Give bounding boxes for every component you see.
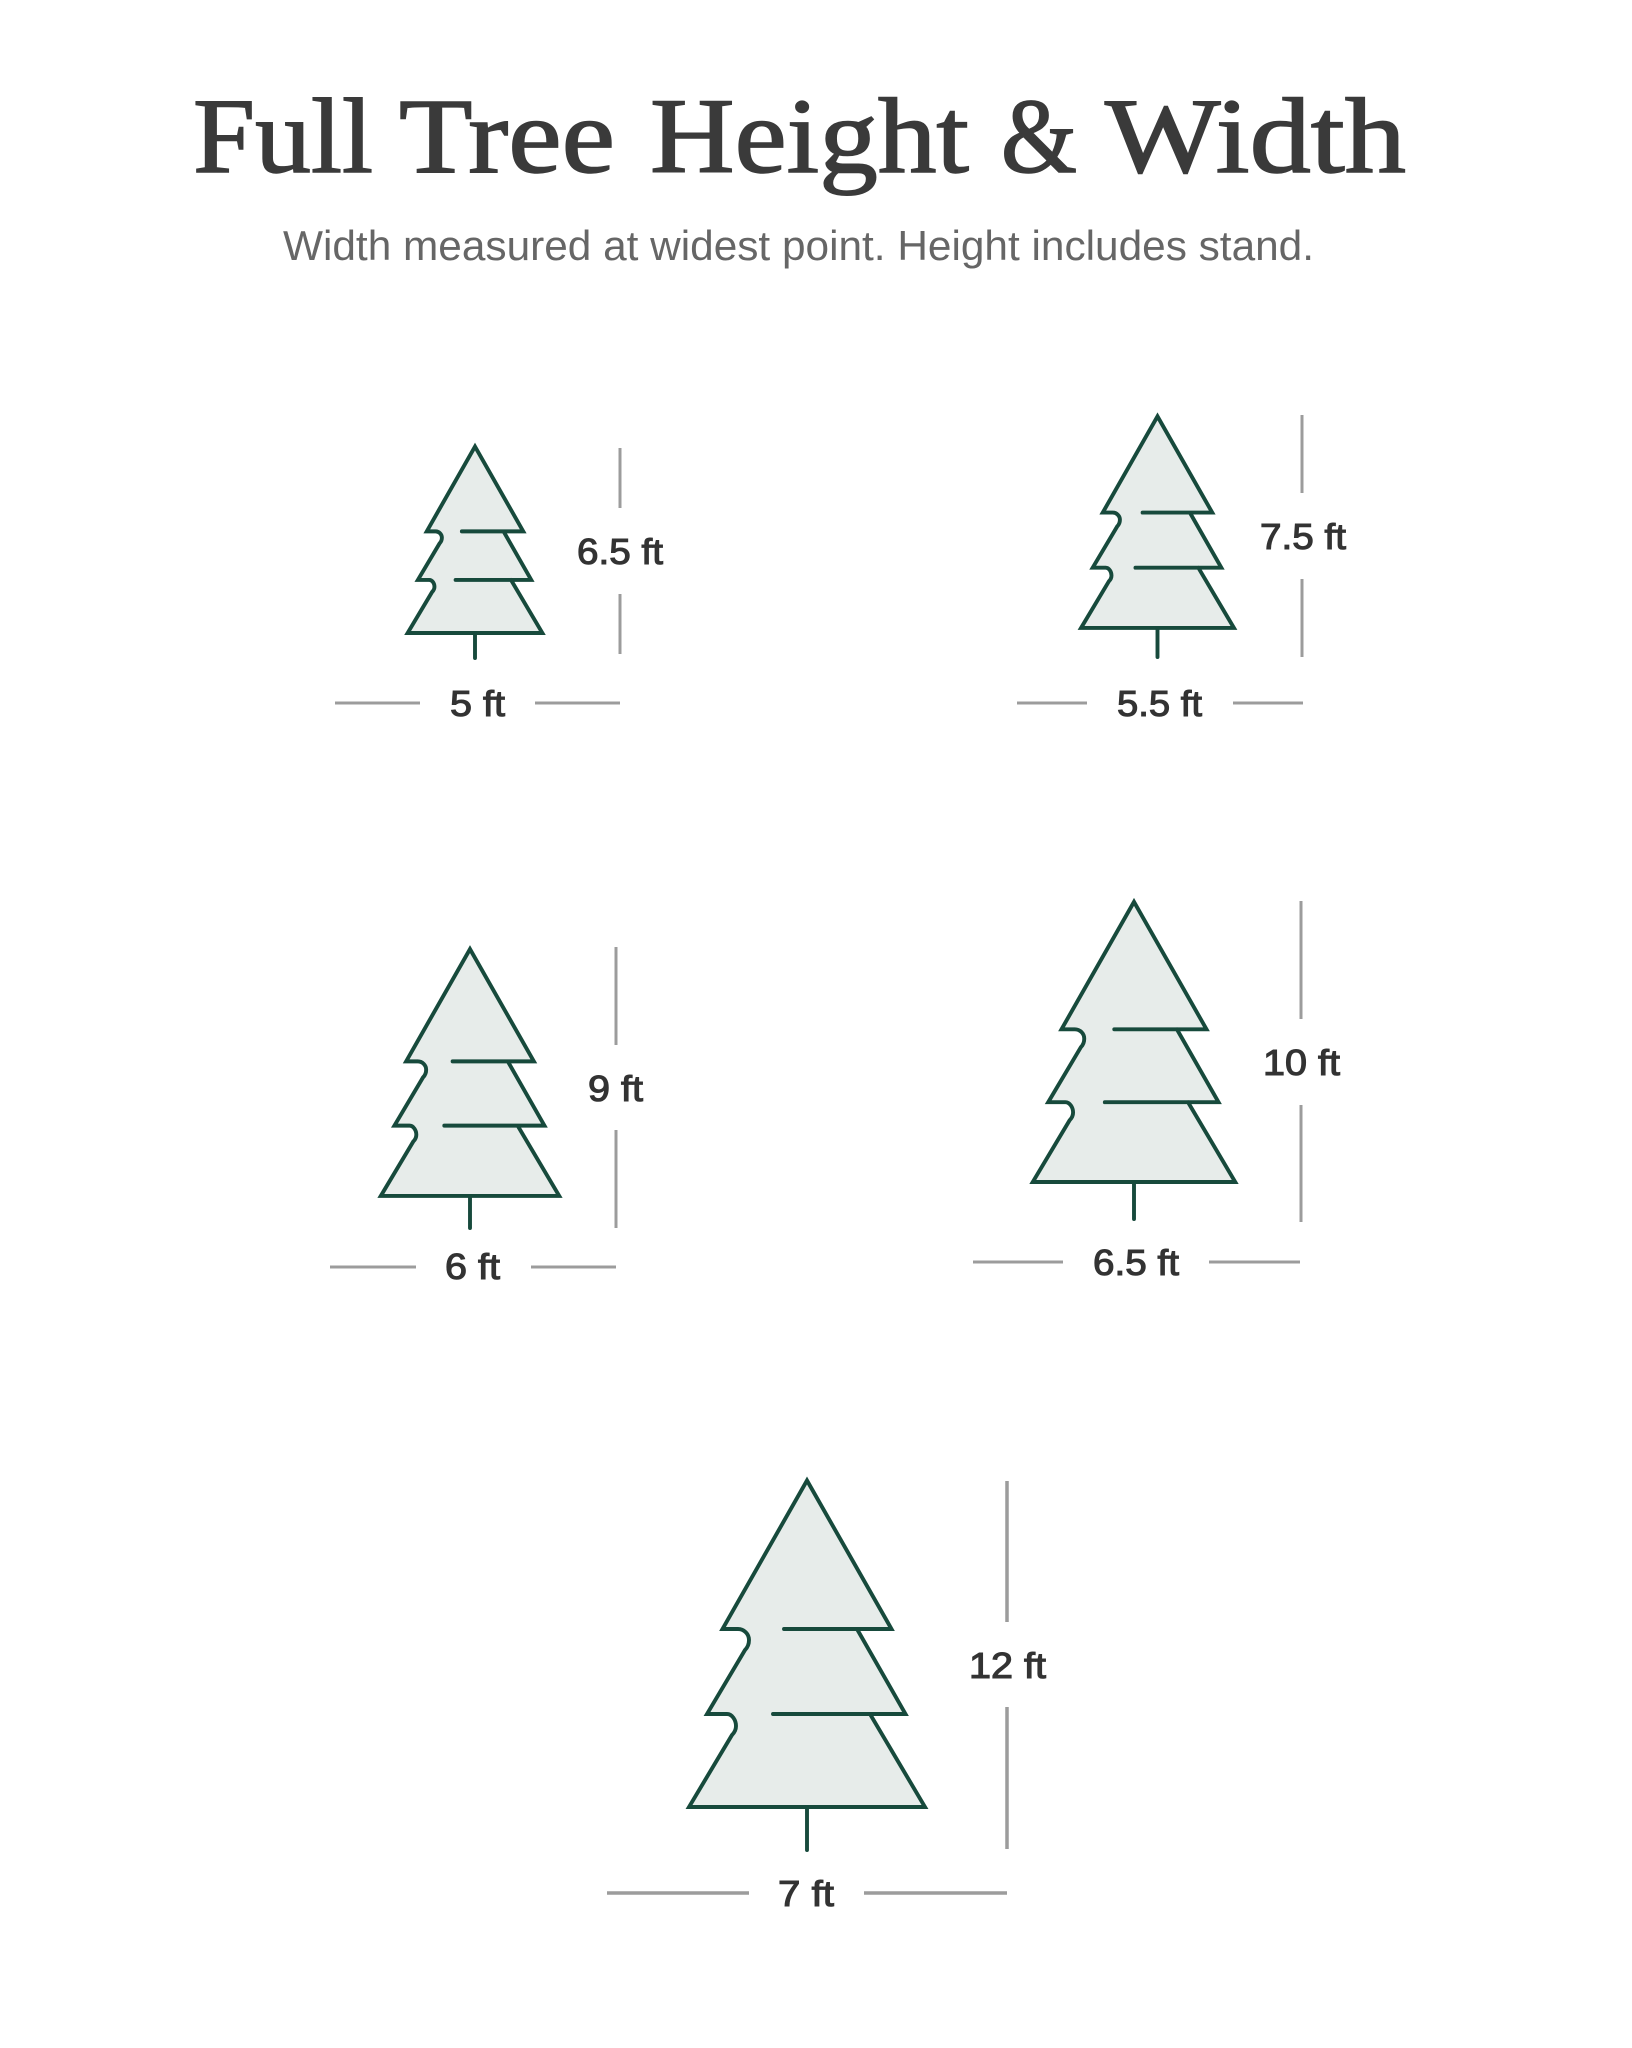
width dimension: 7 ft: [778, 1873, 834, 1914]
icon: tree 10 ft: [1033, 902, 1235, 1219]
panel: tree 5 ft by 6.5 ft: [335, 447, 663, 724]
height dimension: 12 ft: [969, 1645, 1046, 1686]
icon: tree 7.5 ft: [1081, 416, 1234, 657]
icon: tree 6.5 ft: [408, 447, 542, 658]
panel: tree 6.5 ft by 10 ft: [973, 901, 1340, 1283]
title: Width: [1105, 78, 1406, 196]
title: &: [1001, 78, 1077, 196]
title: Tree: [399, 78, 615, 196]
height dimension: 7.5 ft: [1260, 516, 1346, 557]
title: Full: [193, 78, 373, 196]
panel: tree 5.5 ft by 7.5 ft: [1017, 415, 1346, 724]
subtitle: Width measured at widest point. Height includes stand.: [283, 222, 1314, 269]
title: Height: [650, 78, 969, 196]
panel: tree 7 ft by 12 ft: [607, 1480, 1046, 1914]
panel: tree 6 ft by 9 ft: [330, 947, 643, 1287]
height dimension: 6.5 ft: [577, 531, 663, 572]
width dimension: 6.5 ft: [1093, 1242, 1179, 1283]
height dimension: 9 ft: [588, 1068, 643, 1109]
title: [193, 78, 1406, 196]
width dimension: 5 ft: [450, 683, 505, 724]
height dimension: 10 ft: [1263, 1042, 1340, 1083]
icon: tree 9 ft: [381, 949, 559, 1228]
icon: tree 12 ft: [689, 1480, 925, 1850]
width dimension: 6 ft: [445, 1246, 500, 1287]
width dimension: 5.5 ft: [1117, 683, 1202, 724]
